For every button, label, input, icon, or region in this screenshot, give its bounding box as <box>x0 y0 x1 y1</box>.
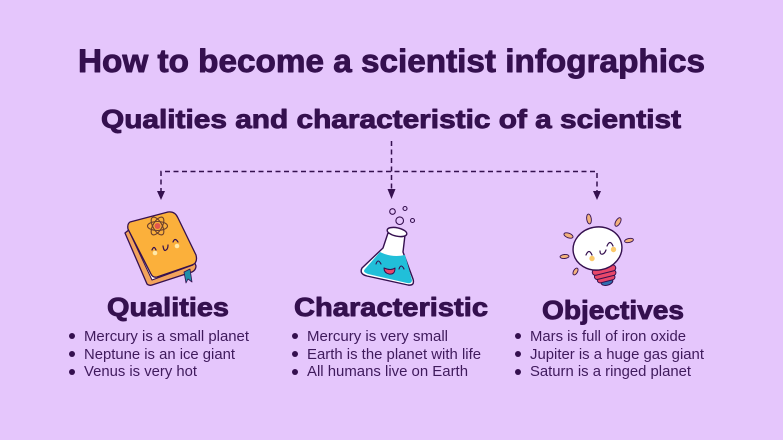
bullet list: Mars is full of iron oxide <box>530 328 686 345</box>
bullet list <box>292 328 481 380</box>
column: Objectives <box>515 295 705 380</box>
bullet list: Earth is the planet with life <box>307 346 481 363</box>
heading: Objectives <box>542 295 684 325</box>
icon: flask <box>361 206 414 285</box>
bubbles <box>390 206 414 224</box>
subtitle: Qualities and characteristic of a scientist <box>101 104 681 134</box>
bullet list <box>515 328 705 380</box>
dashed connector arrows <box>157 141 601 200</box>
atom emblem <box>148 215 168 237</box>
rays <box>560 214 634 276</box>
bullet list: Venus is very hot <box>84 363 198 380</box>
bullet list: All humans live on Earth <box>307 363 468 380</box>
column: Qualities <box>69 292 250 380</box>
bullet list: Jupiter is a huge gas giant <box>530 346 705 363</box>
heading: Characteristic <box>294 292 488 322</box>
column: Characteristic <box>292 292 488 380</box>
bulb screw base <box>592 264 619 288</box>
bullet list: Mercury is a small planet <box>84 328 250 345</box>
bulb face <box>586 242 613 255</box>
bullet list: Neptune is an ice giant <box>84 346 236 363</box>
icon: book <box>125 212 196 285</box>
icon: light bulb <box>560 214 634 288</box>
book face <box>152 240 178 250</box>
heading: Qualities <box>107 292 229 322</box>
bullet list: Mercury is very small <box>307 328 448 345</box>
bullet list <box>69 328 250 380</box>
title: How to become a scientist infographics <box>78 43 705 79</box>
flask face <box>376 261 404 269</box>
bullet list: Saturn is a ringed planet <box>530 363 692 380</box>
